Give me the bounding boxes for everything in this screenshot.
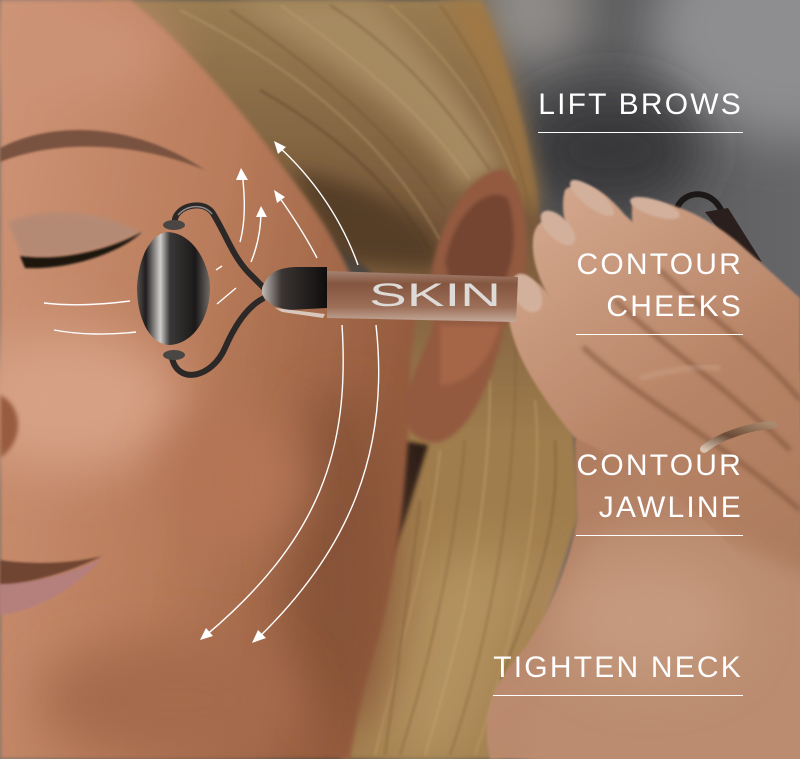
ear	[403, 170, 527, 442]
lower hand blend	[520, 526, 800, 759]
glass handle	[327, 271, 518, 322]
finger: ring	[563, 184, 800, 470]
nose shadow	[0, 395, 18, 458]
eyelashes	[20, 232, 142, 268]
dark gap behind jaw	[385, 440, 428, 575]
second roller head behind hand	[677, 194, 762, 262]
roller frame	[172, 205, 264, 375]
hair shading	[230, 0, 505, 190]
fingernails	[505, 174, 682, 318]
eyebrow	[0, 130, 205, 170]
roller head	[137, 232, 210, 345]
finger: index	[508, 279, 800, 640]
arrow heads	[200, 141, 286, 643]
label: contour cheeks	[576, 244, 743, 335]
label: contour cheeks: CHEEKS	[606, 290, 743, 323]
facial roller	[137, 205, 518, 375]
finger: middle	[533, 220, 800, 520]
eyelid	[8, 212, 142, 258]
label: contour jawline	[576, 445, 743, 536]
hand and fingers	[487, 184, 800, 759]
hair strands	[180, 5, 556, 755]
label: contour jawline: JAWLINE	[599, 491, 743, 524]
label: lift brows: LIFT BROWS	[538, 88, 743, 121]
palm	[487, 380, 800, 759]
label: contour cheeks: CONTOUR	[576, 248, 743, 281]
label: tighten neck	[493, 647, 743, 696]
finger: little	[632, 201, 800, 460]
label: lift brows	[538, 84, 743, 133]
face	[0, 0, 420, 759]
handle collar	[262, 267, 327, 310]
handle brand text: SKIN	[369, 277, 501, 313]
ring	[704, 425, 773, 449]
label: tighten neck: TIGHTEN NECK	[493, 651, 743, 684]
label: contour jawline: CONTOUR	[576, 449, 743, 482]
hair	[100, 0, 578, 759]
finger creases	[583, 270, 800, 510]
lips	[0, 558, 102, 615]
roller knobs	[163, 220, 185, 230]
massage arrows	[44, 146, 379, 640]
